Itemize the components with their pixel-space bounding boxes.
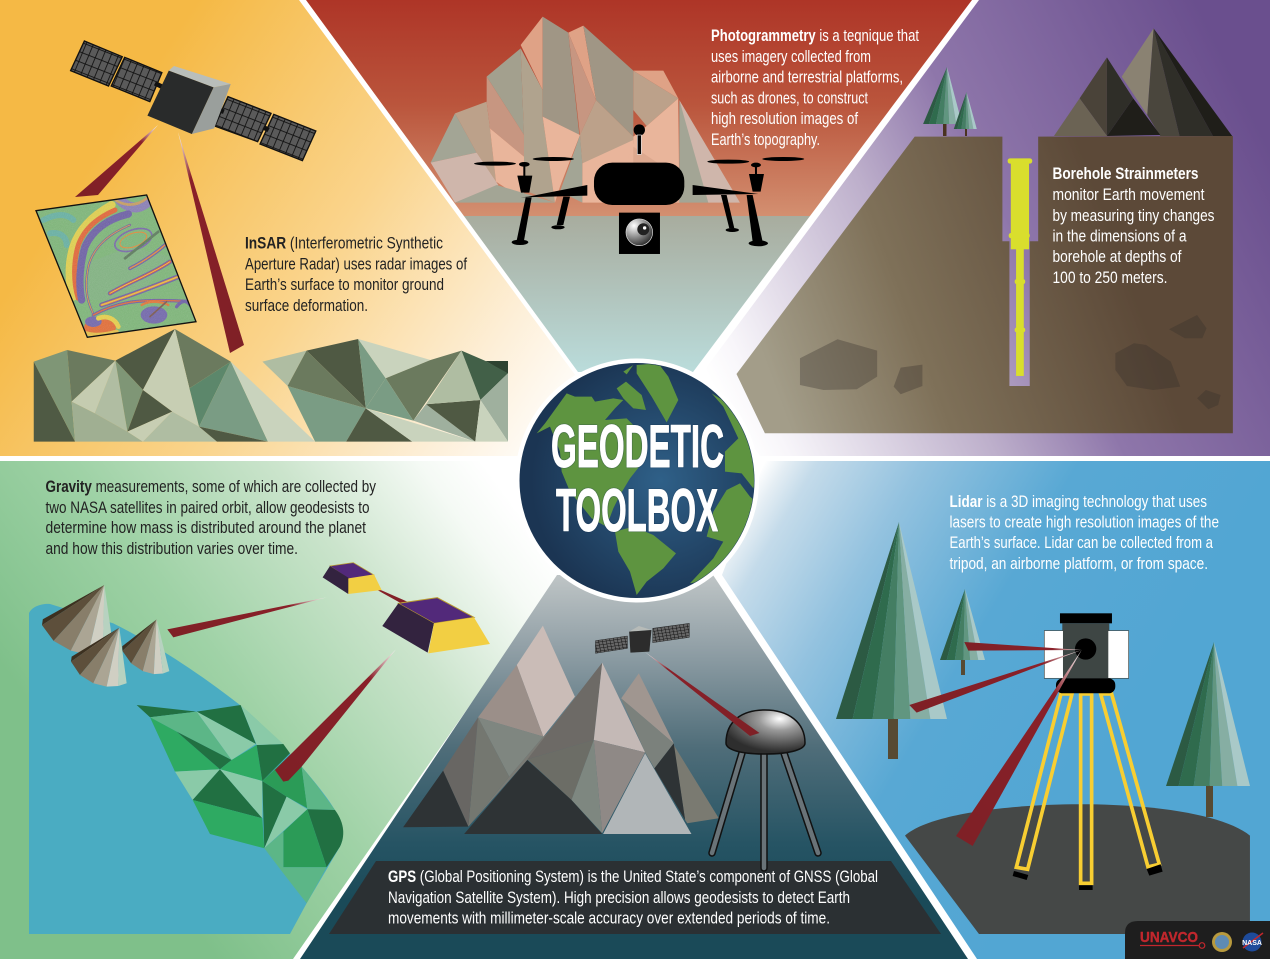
arrow: laser to small tree xyxy=(964,642,1082,651)
mountain: Photogrammetry xyxy=(431,17,740,203)
water xyxy=(29,604,343,934)
logo: NSF xyxy=(1212,932,1232,952)
icon: GNSS satellite xyxy=(595,623,689,653)
arrow: laser to large tree xyxy=(909,650,1082,713)
icon: InSAR satellite xyxy=(71,41,316,161)
trees: Lidar xyxy=(836,522,1256,817)
icon: lidar scanner xyxy=(1044,613,1129,693)
text: Photogrammetry: uses imagery collected from xyxy=(711,47,871,66)
text: InSAR: InSAR (Interferometric Synthetic xyxy=(245,234,443,252)
mountains: GPS xyxy=(403,626,719,834)
mountains: InSAR xyxy=(34,329,508,442)
text: Borehole: by measuring tiny changes xyxy=(1052,206,1214,225)
text: Photogrammetry: such as drones, to construct xyxy=(711,88,868,108)
text: GPS: Navigation Satellite System). High precision allows geodesists to detect Earth xyxy=(388,888,850,907)
text: Photogrammetry: Earth’s topography. xyxy=(711,130,820,149)
text: InSAR: Earth’s surface to monitor ground xyxy=(245,275,444,294)
icon: large gravity satellite xyxy=(382,598,490,653)
logo bar xyxy=(1125,921,1270,959)
icon: tripod feet xyxy=(1013,864,1163,890)
text: Borehole: borehole at depths of xyxy=(1052,247,1182,266)
icon: GPS antenna legs xyxy=(712,753,818,868)
text: Gravity: and how this distribution varies over time. xyxy=(46,539,298,558)
text: Photogrammetry: airborne and terrestrial platforms, xyxy=(711,68,903,86)
text: Photogrammetry: Photogrammetry is a teqnique that xyxy=(711,26,919,45)
text: GPS: movements with millimeter-scale accuracy over extended periods of time. xyxy=(388,908,830,928)
text: Gravity: two NASA satellites in paired orbit, allow geodesists to xyxy=(46,498,370,517)
text: Borehole: monitor Earth movement xyxy=(1052,185,1205,204)
arrow: radar beam to image xyxy=(75,125,158,197)
text: InSAR: surface deformation. xyxy=(245,296,368,315)
text: Borehole: 100 to 250 meters. xyxy=(1052,268,1168,287)
panel: Photogrammetry xyxy=(306,0,972,372)
text: Lidar: tripod, an airborne platform, or from space. xyxy=(950,554,1208,573)
title: GEODETIC TOOLBOX xyxy=(551,413,724,544)
ground xyxy=(905,804,1250,934)
text: InSAR xyxy=(245,234,467,315)
title: GEODETIC TOOLBOX: GEODETIC xyxy=(551,413,724,480)
arrow: beam to cones xyxy=(167,597,327,637)
icon: strainmeter instrument xyxy=(1008,158,1032,376)
text: Borehole: in the dimensions of a xyxy=(1052,226,1187,246)
text: Borehole xyxy=(1052,164,1214,287)
icon: tripod xyxy=(1016,694,1159,883)
panel: Lidar xyxy=(722,461,1270,959)
globe with title xyxy=(515,358,760,602)
panel: Borehole Strainmeters xyxy=(700,0,1270,456)
logo: NASA: NASA xyxy=(1242,940,1262,947)
text: Gravity: Gravity measurements, some of which are collected by xyxy=(46,477,376,496)
arrow: signal into dome xyxy=(645,652,760,736)
panel: GPS xyxy=(300,575,968,959)
panel: Gravity xyxy=(0,461,640,959)
text: InSAR: Aperture Radar) uses radar images of xyxy=(245,254,467,274)
interferogram image xyxy=(30,190,200,340)
icon: small gravity satellite xyxy=(323,563,382,594)
ground cross-section xyxy=(736,136,1233,433)
mountains: Borehole xyxy=(1054,28,1232,136)
arrow: beam between satellites xyxy=(364,583,407,603)
text: GPS: GPS (Global Positioning System) is the United State’s component of GNSS (Global xyxy=(388,867,878,886)
text: Borehole: Borehole Strainmeters xyxy=(1052,164,1198,183)
text: Lidar: Lidar is a 3D imaging technology that uses xyxy=(950,492,1207,511)
arrow: beam to land xyxy=(275,649,396,782)
logo: UNAVCO: UNAVCO xyxy=(1140,930,1198,946)
title: GEODETIC TOOLBOX: TOOLBOX xyxy=(556,477,718,544)
icon: rocky cones xyxy=(42,585,170,687)
land triangles xyxy=(137,705,343,903)
arrow: laser to ground xyxy=(956,650,1082,846)
continents xyxy=(537,363,760,595)
arrow: radar beam to mountains xyxy=(178,132,244,353)
text: GPS xyxy=(388,867,878,928)
text: Gravity xyxy=(46,477,376,558)
text: Photogrammetry xyxy=(711,26,919,149)
text box: GPS xyxy=(329,861,941,934)
icon: drone xyxy=(474,124,804,254)
panel: InSAR xyxy=(0,0,575,456)
text: Photogrammetry: high resolution images of xyxy=(711,109,858,128)
logo: NASA xyxy=(1242,932,1263,952)
trees: Borehole xyxy=(923,67,978,136)
icon: GPS antenna dome xyxy=(726,710,805,754)
text: Lidar xyxy=(950,492,1219,573)
text: Gravity: determine how mass is distributed around the planet xyxy=(46,518,366,537)
